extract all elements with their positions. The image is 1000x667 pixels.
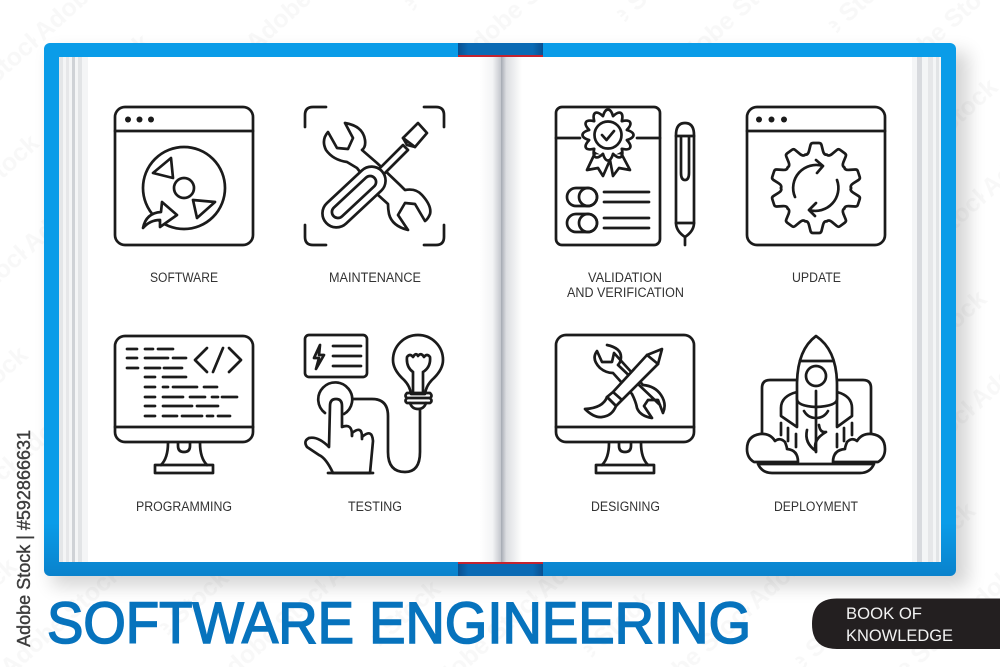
- book cover: [44, 43, 956, 576]
- icon: deployment rocket and laptop: [747, 336, 885, 473]
- badge: book of knowledge: KNOWLEDGE: [846, 627, 953, 645]
- label: validation and verification: [567, 270, 684, 300]
- label: programming: PROGRAMMING: [136, 499, 232, 514]
- badge: book of knowledge: [812, 598, 1000, 649]
- right page: [501, 57, 941, 562]
- icon: update window with gear: [747, 107, 885, 245]
- spine bottom: [458, 562, 543, 576]
- label: update: UPDATE: [792, 270, 841, 285]
- label: software: SOFTWARE: [150, 270, 218, 285]
- icon: testing hand, button and bulb: [305, 335, 443, 473]
- left page: [59, 57, 501, 562]
- label: validation and verification: AND VERIFICATION: [567, 285, 684, 300]
- label: maintenance: MAINTENANCE: [329, 270, 421, 285]
- label: deployment: DEPLOYMENT: [774, 499, 858, 514]
- icon: software window with disc: [115, 107, 253, 245]
- title: SOFTWARE ENGINEERING: [47, 591, 751, 656]
- label: validation and verification: VALIDATION: [588, 270, 662, 285]
- icon: maintenance tools: [305, 107, 444, 245]
- stock id side text: Adobe Stock | #592866631: [14, 430, 34, 647]
- label: testing: TESTING: [348, 499, 402, 514]
- icon: programming monitor: [115, 336, 253, 473]
- spine top: [458, 43, 543, 57]
- icon: validation certificate and pen: [556, 107, 694, 245]
- badge: book of knowledge: BOOK OF: [846, 605, 922, 623]
- label: designing: DESIGNING: [591, 499, 660, 514]
- open book: [44, 43, 968, 586]
- book shadow: [52, 52, 968, 586]
- icon: designing monitor with tools: [556, 335, 694, 473]
